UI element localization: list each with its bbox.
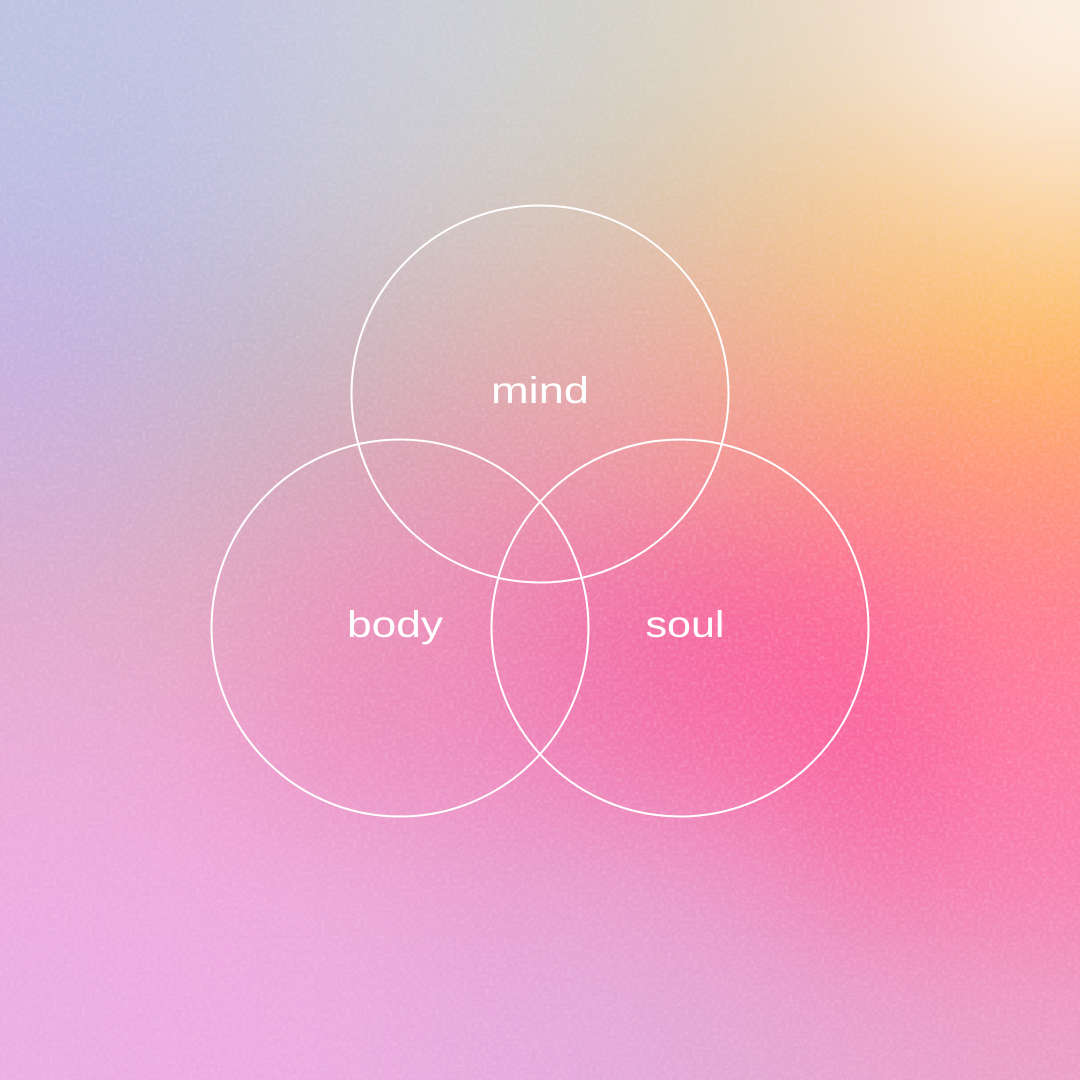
row 3 bbox=[0, 270, 135, 405]
label: soul: soul bbox=[646, 604, 724, 645]
row 4 bbox=[0, 405, 135, 540]
row 2 bbox=[0, 135, 135, 270]
circle: soul bbox=[492, 440, 868, 816]
label: mind: mind bbox=[491, 370, 589, 411]
row 5 bbox=[0, 540, 135, 675]
row 8 bbox=[0, 945, 135, 1080]
circle: body bbox=[212, 440, 588, 816]
label: body: body bbox=[347, 604, 444, 645]
row 7 bbox=[0, 810, 135, 945]
row 1 bbox=[0, 0, 135, 135]
row 6 bbox=[0, 675, 135, 810]
circle: mind bbox=[352, 206, 728, 582]
